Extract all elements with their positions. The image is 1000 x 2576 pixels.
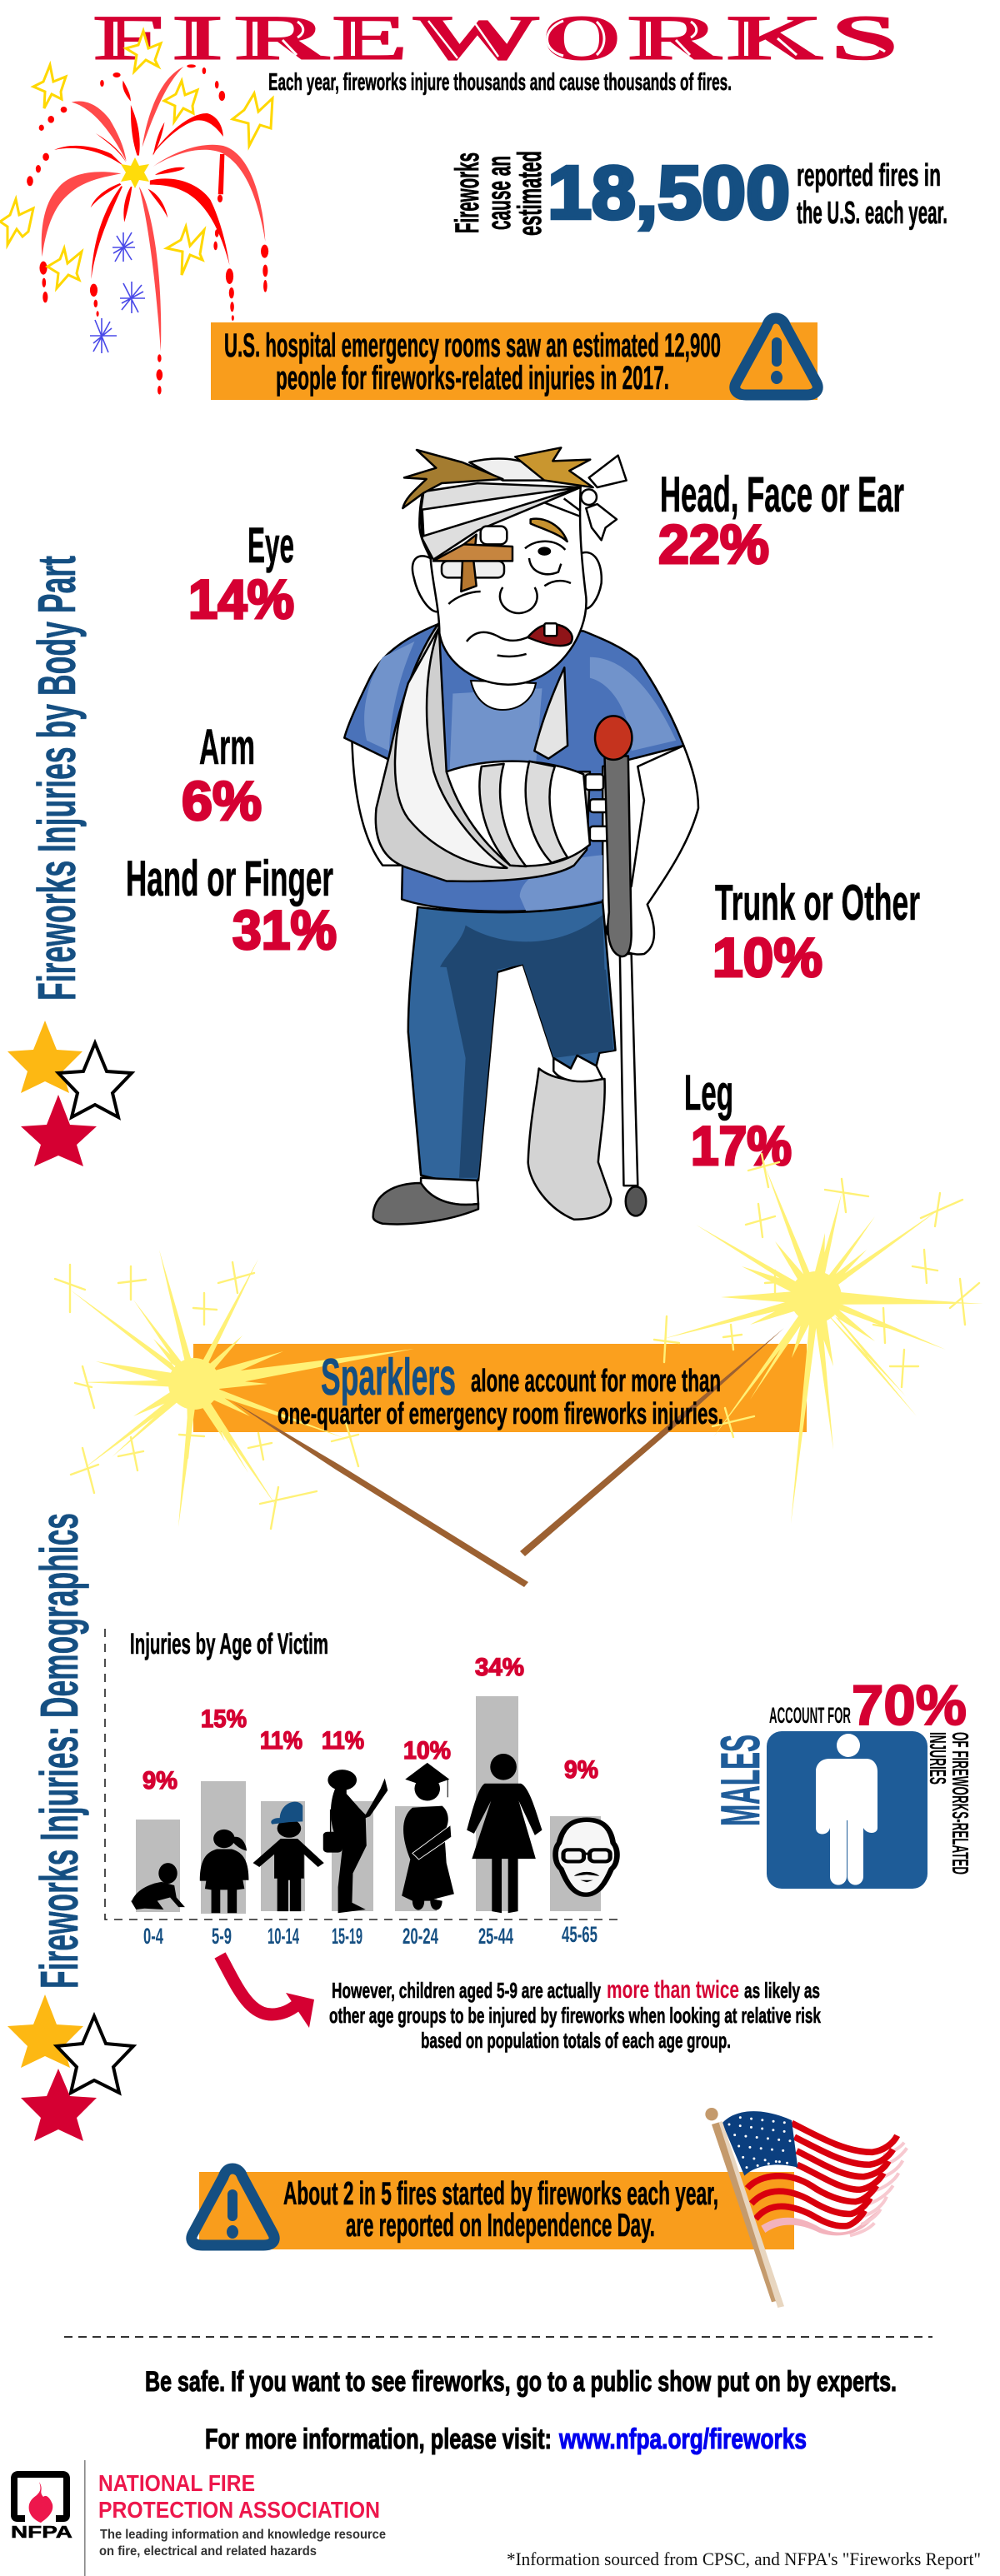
organization tagline: on fire, electrical and related hazards: [99, 2544, 317, 2559]
icon: stars group: [8, 1994, 133, 2141]
icon: sparkler sticks: [232, 1328, 784, 1587]
more information link: For more information, please visit:: [205, 2424, 552, 2455]
icon: NFPA bracket and flame: [11, 2474, 72, 2542]
icon: warning triangle: [735, 318, 818, 395]
body label: arm: Arm: [199, 719, 255, 775]
callout text: sparklers: [278, 1349, 723, 1430]
rotated intro text: cause an: [481, 156, 518, 230]
neck: [471, 681, 536, 710]
rotated intro text: Fireworks: [449, 152, 486, 233]
logo: NFPA: [11, 2460, 386, 2576]
callout text: sparklers: Sparklers: [321, 1349, 456, 1406]
shoe: [421, 1178, 478, 1205]
rotated intro text: [449, 151, 548, 236]
title: E: [332, 2, 408, 73]
pants: [408, 901, 616, 1181]
panel: males stat: OF FIREWORKS-RELATED: [948, 1732, 973, 1875]
icon: male figure: [767, 1731, 928, 1889]
title: R: [628, 2, 722, 73]
callout text: [224, 327, 721, 397]
icon: left sparkler: [55, 1250, 414, 1529]
body label: trunk: [712, 875, 920, 988]
heading: injuries by body part: Fireworks Injuries by Body Part: [27, 556, 87, 1001]
icon: girl: [200, 1830, 248, 1913]
arrow: [220, 1955, 314, 2028]
organization name: NATIONAL FIRE: [98, 2470, 255, 2496]
chart axes: [105, 1629, 622, 1920]
age labels: 45-65: [562, 1922, 598, 1947]
callout text: people for fireworks-related injuries in 2017.: [276, 360, 669, 397]
bar values: [142, 1654, 598, 1795]
more information link: www.nfpa.org/fireworks: [558, 2424, 807, 2455]
title: S: [831, 2, 898, 73]
callout: fires stat: [449, 151, 948, 236]
fingers: [586, 774, 603, 790]
body label: leg: 17%: [691, 1115, 792, 1176]
leg cast: [528, 1068, 611, 1220]
crutch: [620, 954, 638, 1186]
callout text: sparklers: one-quarter of emergency room fireworks injuries.: [278, 1396, 723, 1430]
left arm: [352, 741, 408, 866]
percent: 70%: [852, 1674, 967, 1737]
callout text: are reported on Independence Day.: [346, 2208, 655, 2244]
arm cast: [447, 761, 590, 866]
body label: arm: 6%: [182, 770, 262, 831]
right arm: [606, 746, 698, 954]
panel: males stat: MALES: [709, 1735, 771, 1826]
head: [402, 447, 627, 685]
icon: yellow outline stars: [0, 31, 272, 288]
age labels: 25-44: [478, 1924, 513, 1949]
icon: NFPA bracket and flame: NFPA: [11, 2524, 72, 2542]
title: R: [234, 2, 330, 73]
rotated text: [925, 1732, 973, 1875]
panel: sparklers callout: [193, 1344, 807, 1432]
body label: leg: [684, 1065, 792, 1176]
icon: firework burst: [0, 31, 272, 395]
age labels: 5-9: [212, 1924, 232, 1949]
bar values: 11%: [322, 1727, 364, 1755]
bar values: 15%: [201, 1705, 247, 1733]
chart: injuries by age: [105, 1628, 821, 2053]
icon: warning triangle: [192, 2169, 274, 2245]
title: [93, 2, 898, 73]
body label: eye: [188, 517, 294, 630]
bar values: 10%: [403, 1737, 451, 1765]
body label: eye: Eye: [248, 517, 294, 573]
callout text: sparklers: alone account for more than: [471, 1364, 721, 1399]
body label: hand: [126, 851, 337, 961]
title: K: [727, 2, 823, 73]
body label: trunk: 10%: [712, 926, 822, 988]
body label: eye: 14%: [188, 568, 294, 630]
age labels: 15-19: [332, 1924, 362, 1949]
age labels: 20-24: [402, 1924, 438, 1949]
bar values: 9%: [142, 1767, 178, 1795]
explanatory text: [329, 1976, 821, 2053]
explanatory text: However, children aged 5-9 are actually: [332, 1978, 601, 2003]
heading: demographics: Fireworks Injuries: Demographics: [29, 1513, 89, 1989]
icon: american flag: [705, 2108, 907, 2308]
icon: stars group: [8, 1021, 132, 1166]
sling: [376, 623, 590, 881]
explanatory text: more than twice: [607, 1976, 739, 2004]
icon: blue sparks: [90, 232, 145, 353]
body label: hand: Hand or Finger: [126, 851, 333, 906]
rotated intro text: estimated: [512, 151, 548, 236]
organization name: PROTECTION ASSOCIATION: [98, 2497, 380, 2523]
body label: arm: [182, 719, 262, 831]
panel: emergency rooms callout: [211, 322, 818, 400]
explanatory text: as likely as: [744, 1978, 820, 2003]
explanatory text: based on population totals of each age group.: [421, 2028, 731, 2053]
source note: *Information sourced from CPSC, and NFPA's "Fireworks Report": [507, 2549, 981, 2569]
bar values: 9%: [564, 1756, 598, 1784]
bar values: 34%: [475, 1654, 524, 1681]
body label: leg: Leg: [684, 1065, 733, 1121]
icon: center star: [121, 157, 149, 188]
panel: independence day callout: [199, 2172, 794, 2249]
body label: head: 22%: [658, 513, 769, 575]
age labels: 0-4: [143, 1924, 163, 1949]
callout text: [283, 2176, 718, 2244]
title: O: [542, 2, 622, 73]
icon: right sparkler: [654, 1154, 983, 1524]
organization tagline: The leading information and knowledge resource: [100, 2528, 386, 2542]
age labels: 10-14: [268, 1924, 299, 1949]
chart title: Injuries by Age of Victim: [130, 1628, 328, 1660]
rotated text: INJURIES: [925, 1732, 951, 1785]
title: I: [171, 2, 224, 73]
big number: 18,500: [548, 152, 790, 235]
icon: teen with phone: [323, 1770, 388, 1913]
age labels: [143, 1922, 598, 1949]
title: W: [412, 2, 541, 73]
silhouettes: [131, 1754, 617, 1913]
body label: hand: 31%: [232, 899, 337, 961]
bars: [136, 1696, 601, 1914]
shirt: [344, 623, 683, 911]
illustration: injured man: [344, 447, 698, 1224]
title: F: [93, 2, 166, 73]
icon: older man face: [556, 1820, 617, 1895]
panel: males stat: [709, 1674, 973, 1889]
stat text: [797, 158, 948, 231]
bar values: 11%: [260, 1727, 302, 1755]
icon: woman: [467, 1754, 542, 1913]
organization name: [98, 2470, 380, 2523]
icon: boy with cap: [253, 1802, 324, 1911]
icon: graduate: [402, 1763, 454, 1910]
body label: head: [658, 467, 904, 575]
panel: males stat: ACCOUNT FOR: [769, 1703, 851, 1728]
organization tagline: [99, 2528, 386, 2559]
icon: baby: [131, 1863, 185, 1910]
